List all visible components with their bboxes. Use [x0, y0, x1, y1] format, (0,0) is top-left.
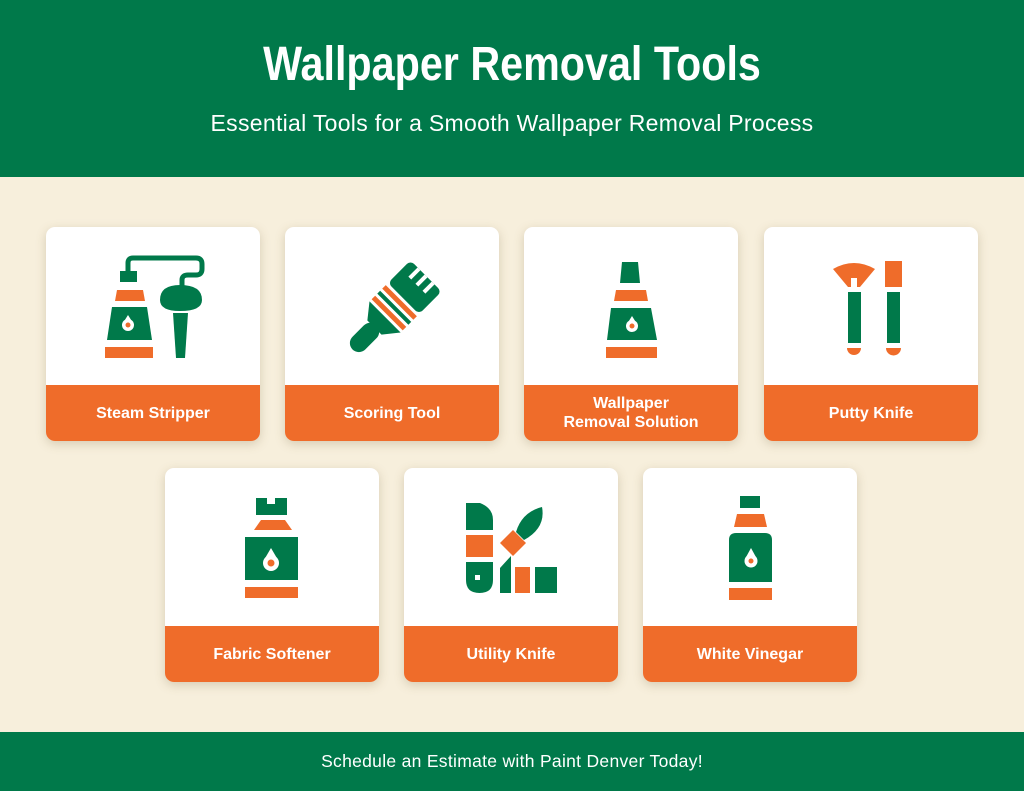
- footer: [0, 732, 1024, 791]
- icon: utility knife: [466, 503, 557, 593]
- icon: steam stripper: [105, 256, 204, 358]
- card: fabric softener: [165, 468, 379, 682]
- label: Scoring Tool: [344, 404, 440, 422]
- icon: putty knives: [833, 261, 902, 356]
- label: Fabric Softener: [213, 646, 331, 662]
- card: scoring tool: [285, 227, 499, 441]
- title: Wallpaper Removal Tools: [263, 38, 761, 91]
- footer: Schedule an Estimate with Paint Denver Today!: [321, 751, 703, 771]
- header: [0, 0, 1024, 177]
- icon: spray bottle: [245, 498, 298, 598]
- icon: brush: [350, 262, 440, 352]
- label: [764, 385, 978, 441]
- icon: vinegar bottle: [729, 496, 772, 600]
- label: Putty Knife: [829, 404, 913, 422]
- label: Utility Knife: [467, 646, 555, 662]
- label: Removal Solution: [563, 414, 699, 431]
- label: [524, 385, 738, 441]
- label: [643, 626, 857, 682]
- label: [46, 385, 260, 441]
- label: [404, 626, 618, 682]
- label: [165, 626, 379, 682]
- icon: bottle: [606, 262, 657, 358]
- card: wallpaper removal solution: [524, 227, 738, 441]
- label: White Vinegar: [697, 646, 803, 662]
- card: putty knife: [764, 227, 978, 441]
- card: steam stripper: [46, 227, 260, 441]
- subtitle: Essential Tools for a Smooth Wallpaper Removal Process: [211, 110, 813, 136]
- card: white vinegar: [643, 468, 857, 682]
- label: [285, 385, 499, 441]
- card: utility knife: [404, 468, 618, 682]
- label: Steam Stripper: [96, 404, 210, 422]
- label: Wallpaper: [593, 395, 669, 412]
